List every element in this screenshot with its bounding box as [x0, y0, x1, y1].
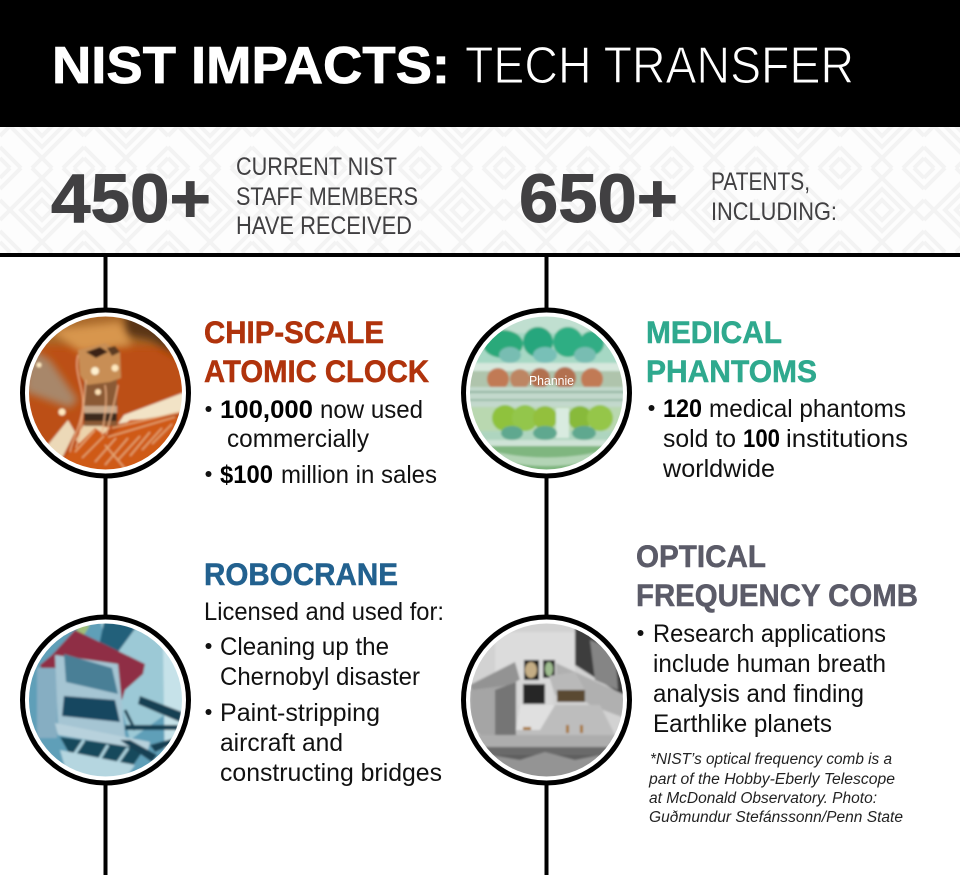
bullets — [648, 395, 908, 483]
footnote: at McDonald Observatory. Photo: — [649, 790, 877, 807]
bullets: now used — [320, 396, 423, 424]
stat: 450+ staff: CURRENT NIST — [236, 153, 397, 181]
icon: chip-scale atomic clock photo — [22, 310, 190, 480]
phantom label: Phannie — [529, 374, 574, 388]
bullets: worldwide — [662, 455, 775, 483]
heading: FREQUENCY COMB — [636, 577, 918, 613]
bullets: 100 — [743, 425, 780, 453]
timeline line left — [104, 257, 108, 875]
bullets — [638, 620, 886, 738]
title text bold: NIST IMPACTS: — [52, 37, 450, 95]
section: optical frequency comb — [636, 538, 918, 826]
section: chip-scale atomic clock — [204, 314, 437, 489]
footnote: Guðmundur Stefánssonn/Penn State — [649, 809, 903, 826]
icon: medical phantom photo — [464, 310, 630, 476]
icon: optical frequency comb photo — [464, 617, 630, 785]
stat: 450+ staff: HAVE RECEIVED — [236, 212, 412, 240]
bullets: medical phantoms — [709, 395, 906, 423]
bullets: aircraft and — [220, 729, 343, 757]
intro line: Licensed and used for: — [204, 598, 444, 626]
bullets: commercially — [227, 425, 369, 453]
heading: ATOMIC CLOCK — [204, 353, 429, 389]
bullets: constructing bridges — [220, 759, 442, 787]
stat: 450+ staff: 450+ — [51, 160, 211, 237]
heading: CHIP-SCALE — [204, 314, 384, 350]
icon: robocrane photo — [22, 617, 188, 785]
heading: OPTICAL — [636, 538, 766, 574]
stat: 650+ patents: INCLUDING: — [711, 198, 837, 226]
bullets: 120 — [663, 395, 702, 423]
footnote — [648, 751, 903, 826]
title banner — [0, 0, 960, 127]
bullets: Earthlike planets — [653, 710, 832, 738]
section: medical phantoms — [646, 314, 908, 483]
stat: 450+ staff — [51, 153, 418, 240]
heading: MEDICAL — [646, 314, 782, 350]
heading — [636, 538, 918, 613]
footnote: *NIST’s optical frequency comb is a — [650, 751, 892, 768]
stat: 650+ patents — [519, 160, 837, 237]
stats band with maze pattern — [0, 127, 960, 257]
bullets: million in sales — [281, 461, 437, 489]
stat: 650+ patents: PATENTS, — [711, 168, 810, 196]
section: robocrane — [204, 556, 444, 787]
heading: ROBOCRANE — [204, 556, 398, 592]
stat: 450+ staff: STAFF MEMBERS — [236, 183, 418, 211]
bullets: Research applications — [653, 620, 886, 648]
title text light: TECH TRANSFER — [465, 37, 854, 95]
heading: PHANTOMS — [646, 353, 817, 389]
bullets: 100,000 — [220, 396, 313, 424]
timeline line right — [544, 257, 548, 875]
heading — [204, 314, 429, 389]
bullets: analysis and finding — [653, 680, 864, 708]
bullets: institutions — [786, 425, 908, 453]
bullets: Paint-stripping — [220, 699, 380, 727]
bullets — [206, 396, 437, 489]
heading — [646, 314, 817, 389]
bullets: sold to — [663, 425, 736, 453]
bullets: include human breath — [653, 650, 886, 678]
footnote: part of the Hobby-Eberly Telescope — [648, 771, 895, 788]
stat: 650+ patents: 650+ — [519, 160, 678, 237]
bullets — [206, 633, 442, 787]
bullets: Cleaning up the — [220, 633, 389, 661]
bullets: $100 — [220, 461, 273, 489]
bullets: Chernobyl disaster — [220, 663, 420, 691]
